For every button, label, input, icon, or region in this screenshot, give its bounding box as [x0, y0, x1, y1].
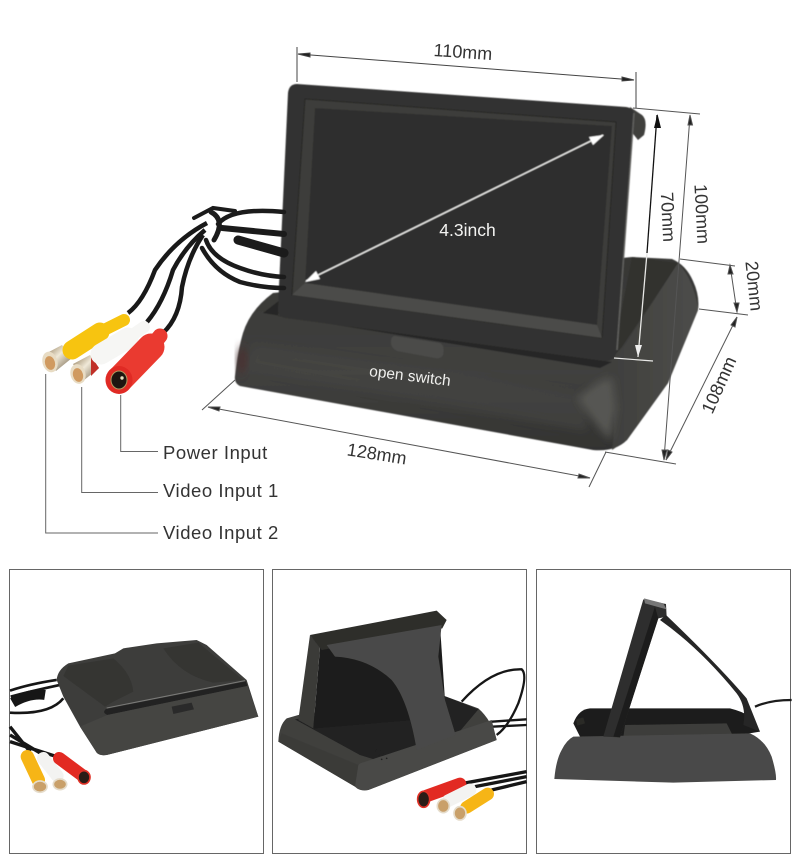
speaker dots [376, 749, 387, 760]
label: 108mm: 108mm [698, 354, 740, 416]
white plug [43, 758, 67, 790]
red plug [418, 784, 460, 807]
label: Video Input 2: Video Input 2 [163, 522, 279, 543]
label: 110mm: 110mm [433, 40, 493, 64]
cables [462, 669, 527, 735]
screen diagonal arrow [305, 135, 604, 282]
support strut [660, 615, 760, 732]
yellow plug [27, 757, 47, 792]
label: 20mm: 20mm [741, 260, 767, 312]
folded monitor photo [10, 640, 258, 792]
panel: folded monitor [10, 570, 264, 854]
front face [80, 686, 258, 755]
main monitor photo [235, 84, 698, 450]
side view photo [554, 598, 792, 783]
yellow RCA plug [40, 320, 124, 374]
yellow plug [454, 794, 488, 820]
monitor base [235, 257, 698, 450]
monitor side [603, 599, 667, 737]
red plug [59, 758, 90, 784]
folded body [57, 640, 258, 755]
red DC plug [106, 336, 160, 394]
label: 100mm: 100mm [690, 184, 714, 244]
panel frame [536, 570, 790, 854]
base tray [573, 708, 760, 737]
base [278, 695, 497, 790]
dimension: 100mm lines [605, 108, 700, 464]
monitor housing [278, 84, 646, 361]
connector cables [128, 223, 207, 333]
label: 4.3inch: 4.3inch [439, 220, 496, 240]
label: 128mm: 128mm [346, 439, 408, 469]
monitor side [298, 635, 320, 728]
rear view photo [278, 611, 527, 820]
base front [554, 733, 776, 783]
open switch button [391, 336, 444, 358]
panel frame [10, 570, 264, 854]
plug cables [463, 772, 527, 790]
label: 70mm: 70mm [657, 192, 679, 242]
dimension: 70mm lines [614, 114, 661, 361]
hinge strut [327, 625, 456, 750]
monitor top bar [310, 611, 447, 650]
dimension: 110mm lines [297, 47, 636, 108]
panel frame [272, 570, 526, 854]
dimension: 108mm lines [666, 317, 737, 460]
label: open switch: open switch [368, 363, 452, 390]
dimension: 20mm lines [680, 259, 748, 315]
monitor back recess [313, 625, 445, 728]
dimension lines [202, 47, 748, 487]
panel: unfolded monitor rear view [272, 570, 527, 854]
white plug [437, 790, 470, 813]
cables [10, 680, 63, 757]
dimension: 128mm lines [202, 380, 606, 487]
label: Power Input: Power Input [163, 442, 268, 463]
side button [576, 717, 585, 726]
leader lines [46, 374, 158, 533]
white RCA plug [68, 327, 144, 386]
cable [755, 700, 792, 707]
lid recesses [63, 658, 133, 707]
panel: unfolded monitor side view [536, 570, 792, 854]
cable loop [194, 208, 284, 288]
label: Video Input 1: Video Input 1 [163, 480, 279, 501]
cables and RCA connectors [40, 208, 284, 533]
